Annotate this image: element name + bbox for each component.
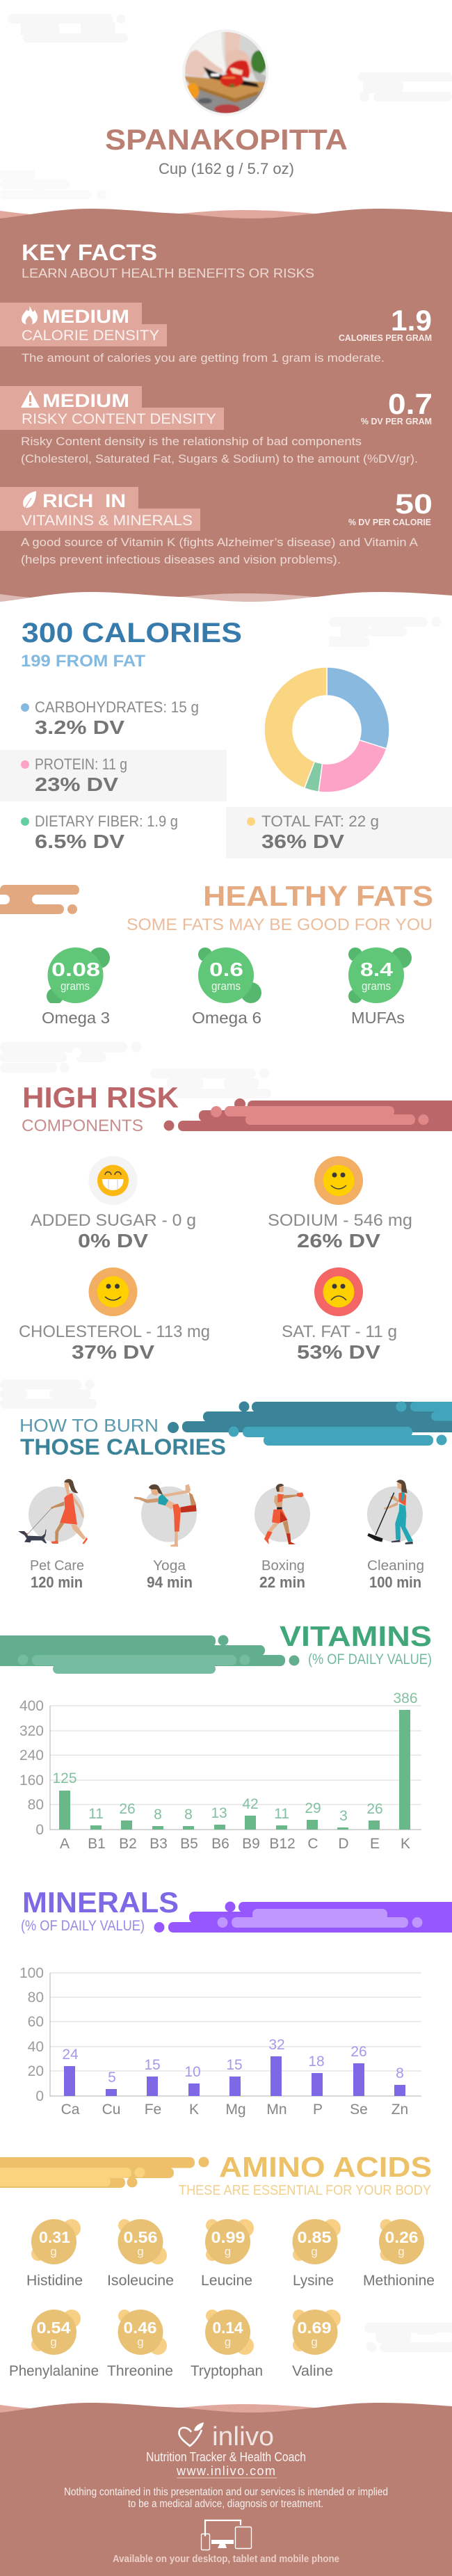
component: added sugar	[31, 1211, 196, 1251]
bar chart: vitamins: B6	[211, 1836, 229, 1852]
icon: grin face	[89, 1156, 138, 1205]
logo	[179, 2422, 274, 2451]
badge: leucine: g	[225, 2245, 231, 2258]
panel: calories	[0, 618, 452, 858]
header cloud	[164, 1098, 452, 1131]
bar chart: vitamins: 13	[211, 1805, 227, 1821]
badge: mufas: MUFAs	[351, 1009, 405, 1027]
heading line 2: THOSE CALORIES	[20, 1434, 226, 1459]
badge: lysine	[292, 2219, 341, 2289]
vitamins description: (helps prevent infectious diseases and vision problems).	[21, 554, 341, 566]
component: cholesterol: CHOLESTEROL - 113 mg	[19, 1322, 210, 1341]
subheading: THESE ARE ESSENTIAL FOR YOUR BODY	[179, 2183, 431, 2198]
badge: lysine: g	[311, 2245, 318, 2258]
icon: smile face	[314, 1156, 363, 1205]
component: cholesterol	[19, 1322, 210, 1363]
badge: leucine	[201, 2219, 254, 2289]
badge: omega 3: grams	[60, 979, 90, 993]
label: pet care: 120 min	[31, 1574, 83, 1591]
heading: healthy fats: HEALTHY FATS	[203, 880, 433, 912]
bar chart: minerals: 5	[108, 2070, 116, 2086]
legend: carbohydrates	[21, 698, 199, 738]
header cloud	[0, 885, 81, 914]
disclaimer: Nothing contained in this presentation and our services is intended or implied	[64, 2486, 388, 2498]
bar chart: minerals: Fe	[145, 2102, 161, 2118]
bar chart: vitamins: 26	[119, 1801, 136, 1817]
panel: vitamins	[0, 1620, 432, 1852]
label: boxing	[259, 1558, 305, 1591]
bar chart: minerals: Ca	[61, 2102, 80, 2118]
badge: omega 6: grams	[211, 979, 241, 993]
header cloud	[0, 2157, 209, 2188]
legend: dietary fiber	[21, 813, 178, 852]
icon: smile face	[89, 1267, 138, 1316]
risky content value	[361, 387, 433, 426]
badge: isoleucine: Isoleucine	[107, 2273, 174, 2289]
bar chart: minerals: 32	[268, 2037, 285, 2053]
badge: tryptophan: Tryptophan	[191, 2363, 263, 2379]
risky content badge	[0, 386, 224, 430]
badge: valine: 0.69	[298, 2319, 331, 2337]
bar chart: vitamins: B5	[180, 1836, 198, 1852]
heading: key facts: KEY FACTS	[22, 240, 157, 265]
legend: total fat: 36% DV	[261, 831, 344, 852]
legend: protein: PROTEIN: 11 g	[35, 755, 127, 773]
badge: isoleucine: 0.56	[124, 2228, 157, 2246]
header cloud	[154, 1902, 452, 1933]
bar chart: vitamins: 11	[274, 1806, 289, 1822]
badge: threonine: Threonine	[107, 2363, 173, 2379]
panel: amino acids	[0, 2151, 435, 2379]
bar chart: vitamins: 29	[305, 1800, 321, 1816]
calorie density value: 1.9	[391, 304, 432, 337]
bar chart: minerals: 80	[28, 1990, 44, 2006]
risky content value: % DV PER GRAM	[361, 416, 432, 426]
bar chart: vitamins: B3	[150, 1836, 168, 1852]
bar chart: minerals: P	[313, 2102, 323, 2118]
bar chart: minerals	[19, 1965, 421, 2118]
bar chart: minerals: 20	[28, 2063, 44, 2079]
component: saturated fat: SAT. FAT - 11 g	[282, 1322, 397, 1341]
panel: healthy fats	[0, 880, 433, 1027]
vitamins description: A good source of Vitamin K (fights Alzheimer’s disease) and Vitamin A	[21, 536, 418, 549]
badge: mufas: grams	[362, 979, 391, 993]
icon: heart and leaf	[179, 2422, 204, 2446]
bar chart: vitamins: 0	[35, 1822, 44, 1838]
donut chart	[264, 667, 389, 792]
component: added sugar: ADDED SUGAR - 0 g	[31, 1211, 196, 1230]
bar chart: vitamins: 320	[19, 1723, 44, 1739]
bar chart: minerals: 0	[35, 2088, 44, 2104]
risky content description	[21, 435, 418, 465]
illustration: boxing	[255, 1484, 310, 1544]
calorie density badge	[0, 303, 167, 346]
subheading: from fat: 199 FROM FAT	[21, 652, 145, 671]
badge: methionine: 0.26	[385, 2228, 419, 2246]
badge: histidine: 0.31	[39, 2228, 70, 2246]
vitamins badge	[0, 487, 200, 531]
tagline: Nutrition Tracker & Health Coach	[146, 2450, 306, 2464]
panel: minerals	[19, 1886, 452, 2118]
badge: valine: g	[311, 2335, 318, 2349]
badge: phenylalanine	[9, 2310, 99, 2379]
badge: histidine: g	[50, 2245, 57, 2258]
bar chart: vitamins: 8	[154, 1807, 162, 1823]
label: cleaning	[367, 1558, 424, 1591]
bar chart: vitamins: D	[338, 1836, 349, 1852]
bar chart: vitamins: 386	[393, 1690, 418, 1706]
label: boxing: Boxing	[261, 1558, 305, 1574]
bar chart: vitamins: 8	[184, 1807, 193, 1823]
badge: lysine: Lysine	[293, 2273, 334, 2289]
title: SPANAKOPITTA	[105, 123, 348, 156]
bar chart: minerals: Cu	[102, 2102, 120, 2118]
badge: omega 3: 0.08	[51, 959, 100, 980]
vitamins value: % DV PER CALORIE	[348, 517, 431, 527]
header cloud	[0, 1635, 299, 1674]
rating: MEDIUM	[42, 306, 129, 327]
website link: www.inlivo.com	[176, 2464, 275, 2478]
legend: carbohydrates: 3.2% DV	[35, 717, 124, 738]
badge: lysine: 0.85	[298, 2228, 332, 2246]
header cloud	[168, 1401, 452, 1446]
risky content description: (Cholesterol, Saturated Fat, Sugars & Sodium) to the amount (%DV/gr).	[21, 453, 418, 465]
bar chart: minerals: 60	[28, 2014, 44, 2030]
bar chart: vitamins: 240	[19, 1747, 44, 1763]
label: pet care	[30, 1558, 84, 1591]
bar chart: minerals: Zn	[392, 2102, 408, 2118]
label: yoga	[147, 1558, 193, 1591]
component: saturated fat	[282, 1322, 397, 1363]
icon: sad face	[314, 1267, 363, 1316]
risky content value: 0.7	[388, 387, 433, 420]
badge: methionine: Methionine	[363, 2273, 435, 2289]
bar chart: minerals: 18	[308, 2054, 325, 2070]
rating: RICH IN	[42, 490, 126, 511]
label: cleaning: 100 min	[369, 1574, 421, 1591]
badge: phenylalanine: 0.54	[36, 2319, 71, 2337]
calorie density value	[339, 304, 432, 343]
panel: key facts	[0, 209, 452, 607]
legend: carbohydrates: CARBOHYDRATES: 15 g	[35, 698, 199, 716]
label: yoga: 94 min	[147, 1574, 193, 1591]
subheading: LEARN ABOUT HEALTH BENEFITS OR RISKS	[22, 266, 314, 280]
panel: how to burn	[18, 1401, 452, 1591]
heading: vitamins: VITAMINS	[280, 1620, 432, 1652]
panel: high risk	[19, 1081, 452, 1363]
bar chart: minerals: Se	[350, 2102, 368, 2118]
disclaimer	[64, 2486, 388, 2510]
bar chart: vitamins: B2	[119, 1836, 137, 1852]
heading: amino acids: AMINO ACIDS	[219, 2151, 432, 2183]
icon: leaf	[23, 491, 36, 508]
bar chart: vitamins: 42	[242, 1796, 259, 1812]
component: sodium	[268, 1211, 412, 1251]
illustration: yoga	[134, 1484, 197, 1546]
label: pet care: Pet Care	[30, 1558, 84, 1574]
badge: threonine: 0.46	[124, 2319, 157, 2337]
badge: mufas	[348, 947, 412, 1027]
badge: valine	[292, 2310, 341, 2379]
badge: threonine: g	[137, 2335, 144, 2349]
vitamins value: 50	[395, 489, 433, 520]
label: RISKY CONTENT DENSITY	[22, 411, 216, 427]
legend: protein: 23% DV	[35, 774, 118, 795]
badge: omega 6	[192, 947, 261, 1027]
badge: phenylalanine: g	[50, 2335, 57, 2349]
legend: total fat	[247, 813, 379, 852]
badge: isoleucine	[107, 2219, 174, 2289]
vitamins description	[21, 536, 418, 566]
bar chart: minerals: Mg	[225, 2102, 246, 2118]
legend: total fat: TOTAL FAT: 22 g	[261, 813, 379, 830]
serving size: Cup (162 g / 5.7 oz)	[159, 160, 294, 177]
bar chart: vitamins	[19, 1690, 421, 1852]
subheading: SOME FATS MAY BE GOOD FOR YOU	[127, 915, 433, 934]
bar chart: vitamins: B9	[242, 1836, 260, 1852]
badge: leucine: 0.99	[211, 2228, 245, 2246]
label: CALORIE DENSITY	[22, 328, 159, 344]
bar chart: vitamins: C	[307, 1836, 318, 1852]
label: yoga: Yoga	[153, 1558, 186, 1574]
illustration: dog walker	[18, 1479, 88, 1544]
icon: warning	[21, 390, 40, 408]
bar chart: vitamins: 11	[88, 1806, 104, 1822]
badge: omega 3: Omega 3	[42, 1009, 110, 1027]
bar chart: vitamins: 160	[19, 1773, 44, 1789]
legend: dietary fiber: 6.5% DV	[35, 831, 124, 852]
badge: phenylalanine: Phenylalanine	[9, 2363, 99, 2379]
wordmark: inlivo	[212, 2422, 274, 2451]
badge: threonine	[107, 2310, 173, 2379]
icon: flame	[22, 306, 38, 324]
badge: valine: Valine	[292, 2363, 333, 2379]
component: cholesterol: 37% DV	[72, 1341, 154, 1363]
badge: leucine: Leucine	[201, 2273, 252, 2289]
label: cleaning: Cleaning	[367, 1558, 424, 1574]
subheading: (% OF DAILY VALUE)	[21, 1918, 145, 1934]
bar chart: vitamins: A	[60, 1836, 70, 1852]
legend: dietary fiber: DIETARY FIBER: 1.9 g	[35, 813, 178, 830]
badge: omega 6: Omega 6	[192, 1009, 261, 1027]
component: sodium: SODIUM - 546 mg	[268, 1211, 412, 1230]
label: boxing: 22 min	[259, 1574, 305, 1591]
bar chart: vitamins: 3	[339, 1808, 348, 1824]
illustration: cleaning	[367, 1480, 423, 1544]
bar chart: minerals: 26	[350, 2044, 367, 2060]
bar chart: minerals: K	[189, 2102, 199, 2118]
food photo	[182, 29, 268, 115]
legend: protein	[21, 755, 127, 795]
bar chart: minerals: 40	[28, 2039, 44, 2055]
badge: isoleucine: g	[137, 2245, 144, 2258]
disclaimer: to be a medical advice, diagnosis or treatment.	[128, 2498, 323, 2510]
subheading: (% OF DAILY VALUE)	[308, 1651, 432, 1667]
panel: footer	[0, 2403, 452, 2576]
bar chart: vitamins: K	[401, 1836, 410, 1852]
badge: tryptophan: g	[225, 2335, 231, 2349]
vitamins value	[348, 489, 433, 527]
bar chart: minerals: 24	[62, 2047, 79, 2063]
component: sodium: 26% DV	[297, 1230, 380, 1251]
bar chart: minerals: 8	[396, 2065, 404, 2081]
bar chart: minerals: 10	[184, 2064, 201, 2080]
heading: minerals: MINERALS	[22, 1886, 179, 1919]
badge: methionine: g	[398, 2245, 405, 2258]
bar chart: minerals: Mn	[266, 2102, 287, 2118]
heading: high risk: HIGH RISK	[22, 1081, 179, 1114]
badge: tryptophan: 0.14	[213, 2319, 243, 2337]
bar chart: vitamins: B1	[88, 1836, 106, 1852]
bar chart: vitamins: 80	[28, 1797, 44, 1813]
icon: devices	[202, 2520, 252, 2550]
badge: tryptophan	[191, 2310, 263, 2379]
heading line 1: HOW TO BURN	[19, 1415, 159, 1436]
component: saturated fat: 53% DV	[297, 1341, 380, 1363]
bar chart: vitamins: 400	[19, 1698, 44, 1714]
calorie density value: CALORIES PER GRAM	[339, 333, 432, 343]
bar chart: minerals: 15	[144, 2057, 161, 2073]
label: VITAMINS & MINERALS	[22, 513, 193, 529]
badge: histidine	[26, 2219, 83, 2289]
availability note: Available on your desktop, tablet and mobile phone	[113, 2553, 339, 2565]
rating: MEDIUM	[42, 390, 129, 411]
bar chart: minerals: 100	[19, 1965, 44, 1981]
badge: histidine: Histidine	[26, 2273, 83, 2289]
bar chart: minerals: 15	[226, 2057, 243, 2073]
heading: calories: 300 CALORIES	[22, 618, 242, 648]
calorie density description: The amount of calories you are getting from 1 gram is moderate.	[22, 352, 385, 365]
risky content description: Risky Content density is the relationship of bad components	[21, 435, 362, 448]
bar chart: vitamins: B12	[269, 1836, 296, 1852]
bar chart: vitamins: 125	[52, 1770, 77, 1786]
badge: mufas: 8.4	[360, 959, 393, 980]
subheading: COMPONENTS	[22, 1117, 143, 1135]
badge: omega 6: 0.6	[209, 959, 243, 980]
component: added sugar: 0% DV	[78, 1230, 148, 1251]
badge: omega 3	[42, 947, 110, 1027]
bar chart: vitamins: 26	[366, 1801, 383, 1817]
badge: methionine	[363, 2219, 435, 2289]
bar chart: vitamins: E	[370, 1836, 380, 1852]
